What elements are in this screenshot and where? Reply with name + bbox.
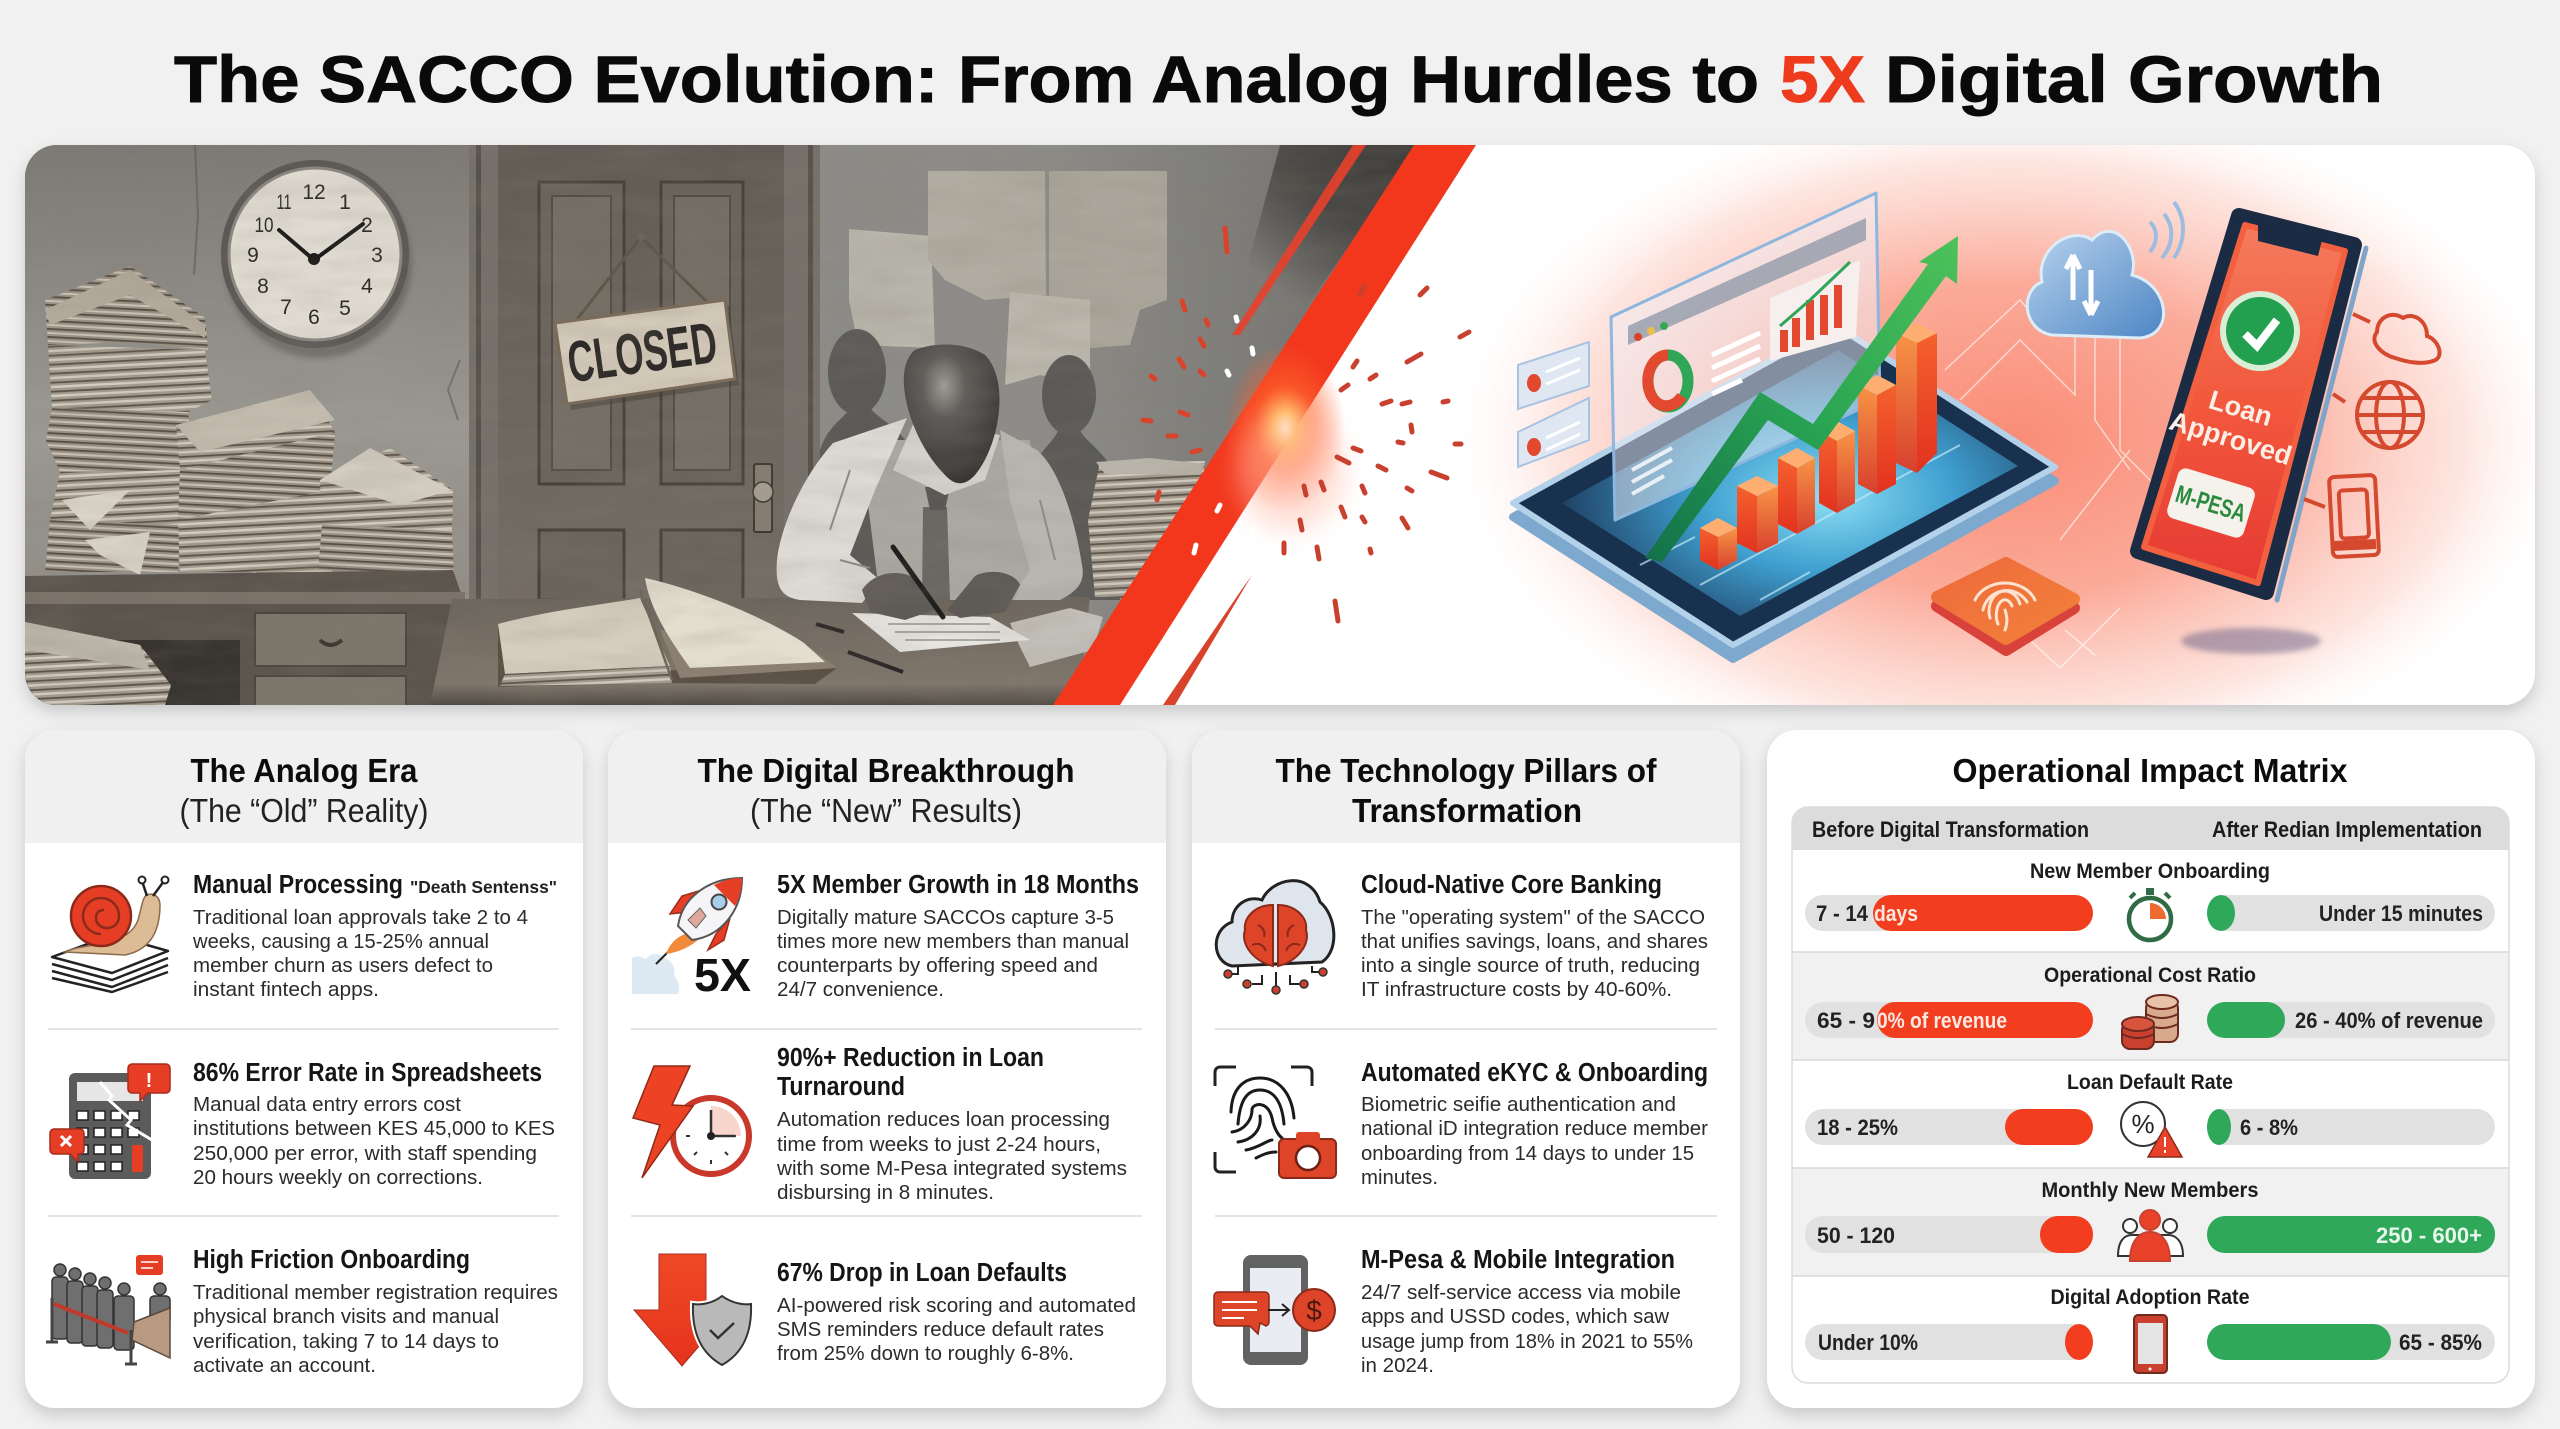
text: member growth: Digitally mature SACCOs capture 3-5 [777,906,1114,929]
text: manual processing: weeks, causing a 15-25% annual [192,930,489,953]
text: member growth: 24/7 convenience. [777,978,944,1001]
row: digital adoption rate: Under 10% [1818,1330,1918,1355]
text: loan defaults: from 25% down to roughly 6-8%. [777,1342,1074,1365]
wall clock [221,160,412,358]
circuit links [1944,299,2151,669]
outline icons: cloud, globe, phone [2304,314,2440,557]
icon: coin stacks [2122,995,2178,1049]
wall clock: 7 [280,296,292,319]
column headers: Before Digital Transformation [1812,817,2089,842]
wall clock: 5 [339,297,351,320]
text: cloud-native core banking [1361,871,1708,1001]
text: automated ekyc: Biometric seifie authentication and [1361,1093,1676,1116]
fingerprint tile [1937,563,2074,650]
smartphone: loan approved [2138,216,2366,654]
row: digital adoption rate: 65 - 85% [2399,1330,2482,1355]
title: 5X [1780,42,1865,116]
text: manual processing: "Death Sentenss" [410,877,557,897]
icon: broken calculator [50,1064,170,1179]
icon: people group [2118,1210,2183,1261]
door with frame [469,145,820,605]
wall clock: 2 [361,214,373,237]
icon: mobile phone [2134,1315,2167,1373]
text: member growth: counterparts by offering speed and [777,954,1098,977]
text: high friction onboarding: activate an account. [193,1354,376,1377]
wall clock: 11 [276,191,292,214]
heading: The Digital Breakthrough [698,752,1074,789]
row: operational cost ratio: 26 - 40% of revenue [2295,1008,2483,1033]
text: manual processing: Manual Processing [193,871,403,899]
panel: operational impact matrix [1767,730,2535,1408]
icon: queue at counter [46,1255,170,1364]
text: cloud-native core banking: The "operating system" of the SACCO [1361,906,1705,929]
text: member growth: times more new members than manual [777,930,1129,953]
panel: the technology pillars [1192,730,1740,1408]
text: automated ekyc [1361,1059,1708,1189]
row: loan default rate: Loan Default Rate [2067,1071,2233,1094]
text: high friction onboarding: verification, taking 7 to 14 days to [193,1330,499,1353]
wall clock: 1 [339,191,351,214]
row: new member onboarding: Under 15 minutes [2319,901,2483,926]
smartphone: loan approved: Loan [2205,385,2276,432]
heading: Transformation [1352,792,1582,829]
title [174,42,2383,116]
row: loan default rate: 6 - 8% [2240,1115,2298,1140]
wall clock: 8 [257,275,269,298]
icon: snail on papers [52,876,168,992]
paper stacks on desk [45,266,454,574]
heading: (The “Old” Reality) [180,792,428,829]
closed sign [555,233,739,410]
icon: percent warning [2121,1102,2182,1157]
text: manual processing: member churn as users defect to [193,954,493,977]
text: loan turnaround: disbursing in 8 minutes. [777,1181,994,1204]
shadow silhouettes [820,329,1120,600]
open ledger [498,578,837,687]
closed sign: CLOSED [563,310,721,395]
text: manual processing: Traditional loan approvals take 2 to 4 [193,906,528,929]
text: loan turnaround: Automation reduces loan processing [777,1108,1110,1131]
text: error rate [193,1059,555,1189]
icon: phone with payment: $ [1306,1295,1322,1326]
text: m-pesa and mobile: 24/7 self-service access via mobile [1361,1281,1681,1304]
icon: rocket 5X [632,878,751,1001]
row: monthly new members: 250 - 600+ [2376,1223,2482,1248]
heading: (The “New” Results) [750,792,1022,829]
text: automated ekyc: onboarding from 14 days to under 15 [1361,1142,1694,1165]
icon: percent warning: % [2131,1109,2155,1139]
text: manual processing [192,871,557,1001]
row: monthly new members [1805,1179,2495,1261]
text: member growth [777,871,1139,1001]
text: cloud-native core banking: IT infrastructure costs by 40-60%. [1361,978,1672,1001]
row: new member onboarding: New Member Onboarding [2030,860,2270,883]
icon: phone with payment [1214,1255,1335,1365]
cloud sync icon [2027,202,2183,338]
wall clock: 10 [254,214,274,237]
column headers: After Redian Implementation [2212,817,2482,842]
text: cloud-native core banking: Cloud-Native Core Banking [1361,871,1662,899]
heading: Operational Impact Matrix [1952,752,2348,789]
glass dashboard [1611,193,1880,520]
heading [180,752,428,829]
wall clock: 12 [302,181,326,204]
text: error rate: 250,000 per error, with staff spending [193,1142,537,1165]
spark burst [1143,228,1469,621]
icon: lightning and clock [633,1066,749,1178]
left desk and drawers [25,570,465,706]
heading [698,752,1074,829]
main desk [430,597,1090,705]
row: loan default rate [1805,1071,2495,1157]
icon: broken calculator: ! [146,1070,152,1092]
text: member growth: 5X Member Growth in 18 Months [777,871,1139,899]
row: digital adoption rate: Digital Adoption Rate [2050,1286,2250,1309]
pinned notices [849,171,1167,385]
wall clock: 3 [371,244,383,267]
M-Pesa badge: M-PESA [2172,480,2249,528]
heading: The Analog Era [190,752,418,789]
3D bars [1700,323,1937,570]
text: m-pesa and mobile: in 2024. [1361,1354,1434,1377]
title: Digital Growth [1885,42,2383,116]
row: operational cost ratio: 65 - 9 [1817,1008,1875,1033]
document, hands and loose papers [816,547,1103,672]
row: monthly new members: 50 - 120 [1817,1223,1895,1248]
text: m-pesa and mobile: usage jump from 18% in 2021 to 55% [1361,1330,1693,1353]
icon: down arrow and shield [634,1254,751,1366]
icon: stopwatch [2129,888,2171,940]
icon: fingerprint scan and camera [1215,1067,1336,1178]
wall clock: 6 [308,306,320,329]
wall clock: 4 [361,275,373,298]
text: loan turnaround: 90%+ Reduction in Loan [777,1044,1044,1072]
text: loan turnaround: time from weeks to just 2-24 hours, [777,1133,1101,1156]
text: error rate: Manual data entry errors cost [193,1093,461,1116]
floating message cards [1518,342,1589,467]
text: error rate: 86% Error Rate in Spreadsheets [193,1059,542,1087]
text: high friction onboarding: Traditional member registration requires [193,1281,558,1304]
heading: The Technology Pillars of [1276,752,1657,789]
row: loan default rate: 18 - 25% [1817,1115,1898,1140]
tablet with 3D bar chart [1513,193,2055,659]
text: error rate: 20 hours weekly on corrections. [193,1166,483,1189]
text: loan turnaround: with some M-Pesa integrated systems [776,1157,1127,1180]
text: m-pesa and mobile [1361,1246,1693,1377]
row: operational cost ratio: 0% of revenue [1877,1008,2007,1033]
text: automated ekyc: minutes. [1361,1166,1438,1189]
green growth arrow [1645,236,1958,562]
text: loan defaults: 67% Drop in Loan Defaults [777,1259,1067,1287]
row: new member onboarding [1805,860,2495,940]
text: loan turnaround [776,1044,1127,1204]
table [1792,807,2509,1383]
text: automated ekyc: Automated eKYC & Onboarding [1361,1059,1708,1087]
text: automated ekyc: national iD integration reduce member [1361,1117,1708,1140]
M-Pesa badge [2165,466,2257,540]
icon: rocket 5X: 5X [694,949,751,1001]
right paper pile [1088,458,1205,600]
row: operational cost ratio [1805,964,2495,1049]
text: loan defaults: AI-powered risk scoring and automated [777,1294,1136,1317]
text: error rate: institutions between KES 45,000 to KES [193,1117,555,1140]
text: m-pesa and mobile: M-Pesa & Mobile Integration [1361,1246,1675,1274]
text: high friction onboarding: High Friction Onboarding [193,1246,470,1274]
row: monthly new members: Monthly New Members [2042,1179,2258,1202]
row: new member onboarding: days [1874,901,1918,926]
heading [1276,752,1657,829]
text: m-pesa and mobile: apps and USSD codes, which saw [1361,1305,1669,1328]
panel: the analog era [25,730,583,1408]
text: high friction onboarding [193,1246,558,1377]
row: operational cost ratio: Operational Cost Ratio [2044,964,2256,987]
row: new member onboarding: 7 - 14 [1816,901,1869,926]
column headers [1812,817,2482,842]
panel: the digital breakthrough [608,730,1166,1408]
title: The SACCO Evolution: From Analog Hurdles to [174,42,1759,116]
red diagonal slash [1053,145,1476,705]
wall clock: 9 [247,244,259,267]
text: cloud-native core banking: into a single source of truth, reducing [1361,954,1700,977]
text: cloud-native core banking: that unifies savings, loans, and shares [1361,930,1708,953]
person at desk [777,345,1083,603]
text: manual processing: instant fintech apps. [193,978,379,1001]
row: digital adoption rate [1805,1286,2495,1373]
text: loan defaults [777,1259,1136,1365]
analog office scene [25,145,1485,706]
text: loan defaults: SMS reminders reduce default rates [777,1318,1104,1341]
smartphone: loan approved: Approved [2166,406,2295,471]
text: loan turnaround: Turnaround [777,1073,905,1101]
digital side background [1120,145,2560,705]
hero banner: analog to digital [25,145,2560,706]
text: high friction onboarding: physical branch visits and manual [193,1305,499,1328]
icon: cloud with brain [1216,881,1334,994]
